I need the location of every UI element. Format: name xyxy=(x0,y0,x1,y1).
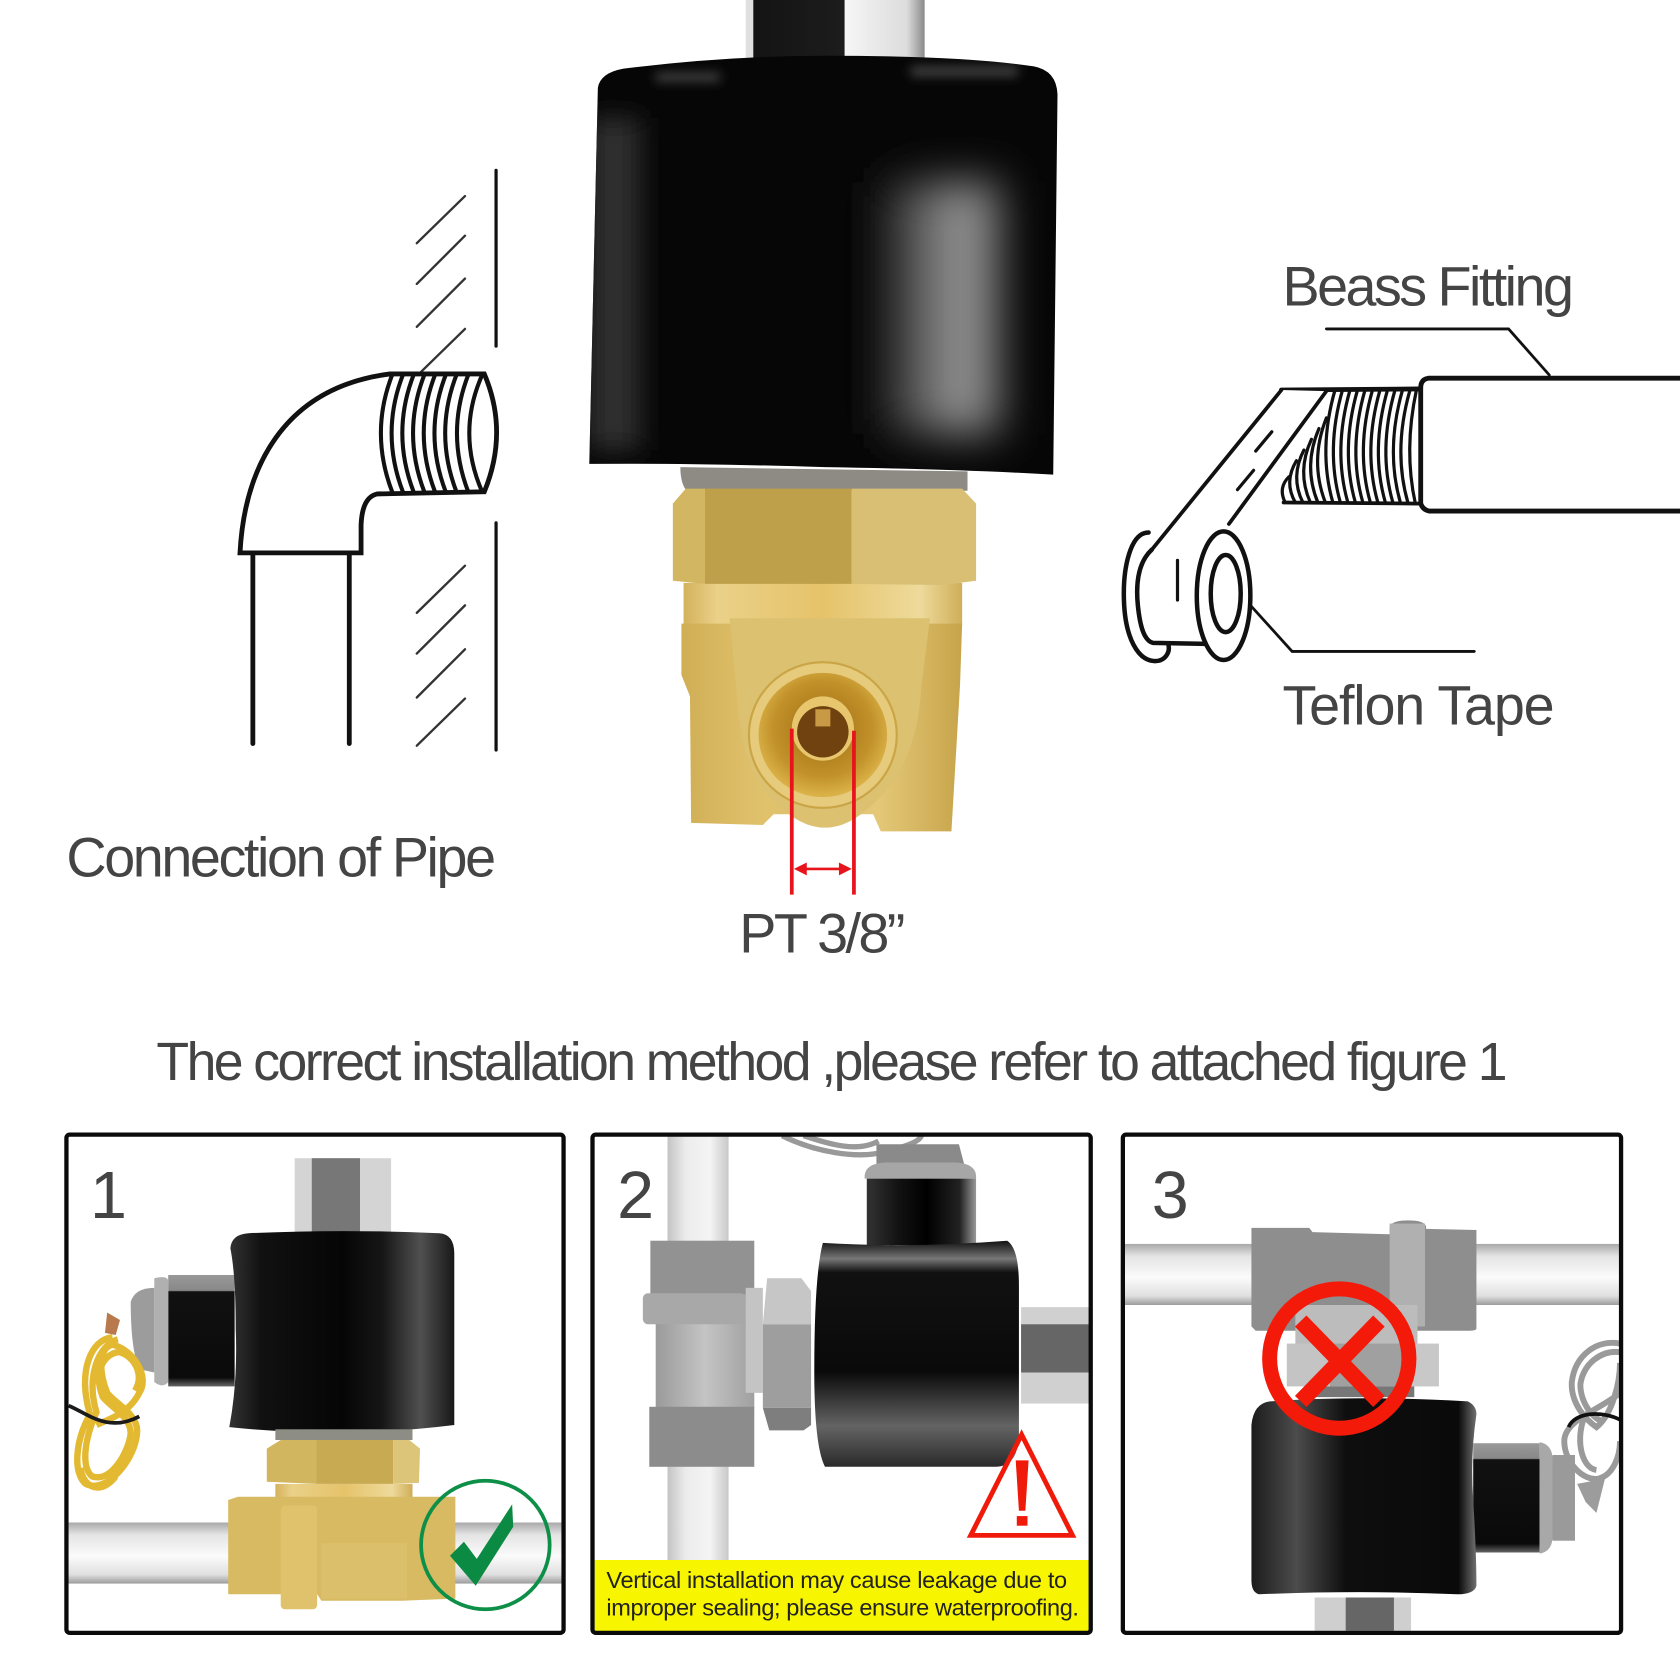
end hex xyxy=(1021,1307,1091,1404)
yellow wires xyxy=(77,1337,143,1487)
grey neck xyxy=(1295,1305,1418,1346)
heading: The correct installation method ,please refer to attached figure 1 xyxy=(156,1033,1508,1092)
panel frame xyxy=(1123,1135,1621,1633)
brass nut xyxy=(267,1440,420,1484)
brass front face xyxy=(730,618,930,828)
grey nut xyxy=(1287,1344,1439,1386)
grey valve body xyxy=(1251,1220,1476,1331)
black wire tie xyxy=(1569,1414,1622,1427)
tape roll xyxy=(1124,531,1250,661)
pipe xyxy=(1123,1244,1622,1305)
coil xyxy=(229,1231,454,1433)
teflon tape strip xyxy=(1152,390,1326,568)
warning triangle xyxy=(971,1435,1072,1535)
label: brass fitting: Beass Fitting xyxy=(1282,255,1574,317)
red cross xyxy=(1301,1321,1379,1401)
brass neck xyxy=(275,1484,412,1497)
yellow caution note: Vertical installation may cause leakage due to xyxy=(606,1567,1067,1593)
elbow outline xyxy=(240,374,497,744)
copper wire ends xyxy=(105,1312,120,1335)
brass neck xyxy=(684,583,962,626)
grey cap xyxy=(865,1144,976,1179)
top stub xyxy=(867,1179,976,1245)
fitting body xyxy=(1421,378,1680,511)
number 3: 3 xyxy=(1152,1159,1189,1233)
brass body xyxy=(681,624,962,831)
wire ends xyxy=(1577,1479,1605,1513)
label: PT 3/8: PT 3/8” xyxy=(739,902,905,964)
grey cap xyxy=(1540,1442,1575,1554)
vertical pipe xyxy=(668,1134,729,1562)
main valve photo xyxy=(587,0,1058,831)
coil xyxy=(1251,1398,1476,1594)
grey valve body xyxy=(643,1241,763,1467)
leader lines xyxy=(1326,329,1549,375)
dimension marker PT 3/8 xyxy=(792,729,854,895)
bottom hex xyxy=(1315,1598,1411,1634)
diagram: connection of pipe xyxy=(240,170,497,750)
side stub xyxy=(1473,1443,1540,1552)
black coil xyxy=(587,56,1058,475)
label: teflon tape: Teflon Tape xyxy=(1282,674,1555,736)
diagram: brass fitting with teflon tape xyxy=(1124,329,1680,661)
threads xyxy=(1282,390,1416,504)
top hex nut xyxy=(746,0,925,60)
brass body xyxy=(228,1497,455,1609)
thread top and bottom edges xyxy=(1281,389,1421,390)
label: connection of pipe: Connection of Pipe xyxy=(66,826,496,888)
check circle xyxy=(421,1481,550,1609)
pipe xyxy=(64,1522,568,1584)
washer xyxy=(275,1429,412,1440)
coil xyxy=(814,1241,1019,1467)
number 2: 2 xyxy=(617,1159,654,1233)
grey wires xyxy=(782,1136,921,1155)
panel frame xyxy=(66,1135,564,1633)
side stub and cap xyxy=(131,1275,235,1386)
grey wires xyxy=(1564,1343,1620,1479)
panel 1: correct installation xyxy=(64,1135,568,1633)
panel frame xyxy=(592,1135,1091,1633)
prohibition circle xyxy=(1270,1289,1409,1428)
brass hex nut xyxy=(673,489,976,585)
black wire tie xyxy=(69,1406,139,1423)
washer xyxy=(1307,1386,1414,1397)
panel 3: incorrect installation xyxy=(1123,1135,1622,1634)
panel 2: vertical caution xyxy=(592,1134,1091,1633)
washer xyxy=(680,467,968,491)
yellow caution note: improper sealing; please ensure waterproofing. xyxy=(606,1595,1079,1621)
number 1: 1 xyxy=(90,1159,127,1233)
port bore xyxy=(749,662,897,808)
valve hex top xyxy=(295,1158,391,1233)
yellow caution note xyxy=(595,1560,1091,1632)
check mark xyxy=(450,1504,513,1586)
wall lines xyxy=(417,170,496,750)
pipe threads xyxy=(381,375,482,492)
grey nut xyxy=(763,1278,811,1430)
